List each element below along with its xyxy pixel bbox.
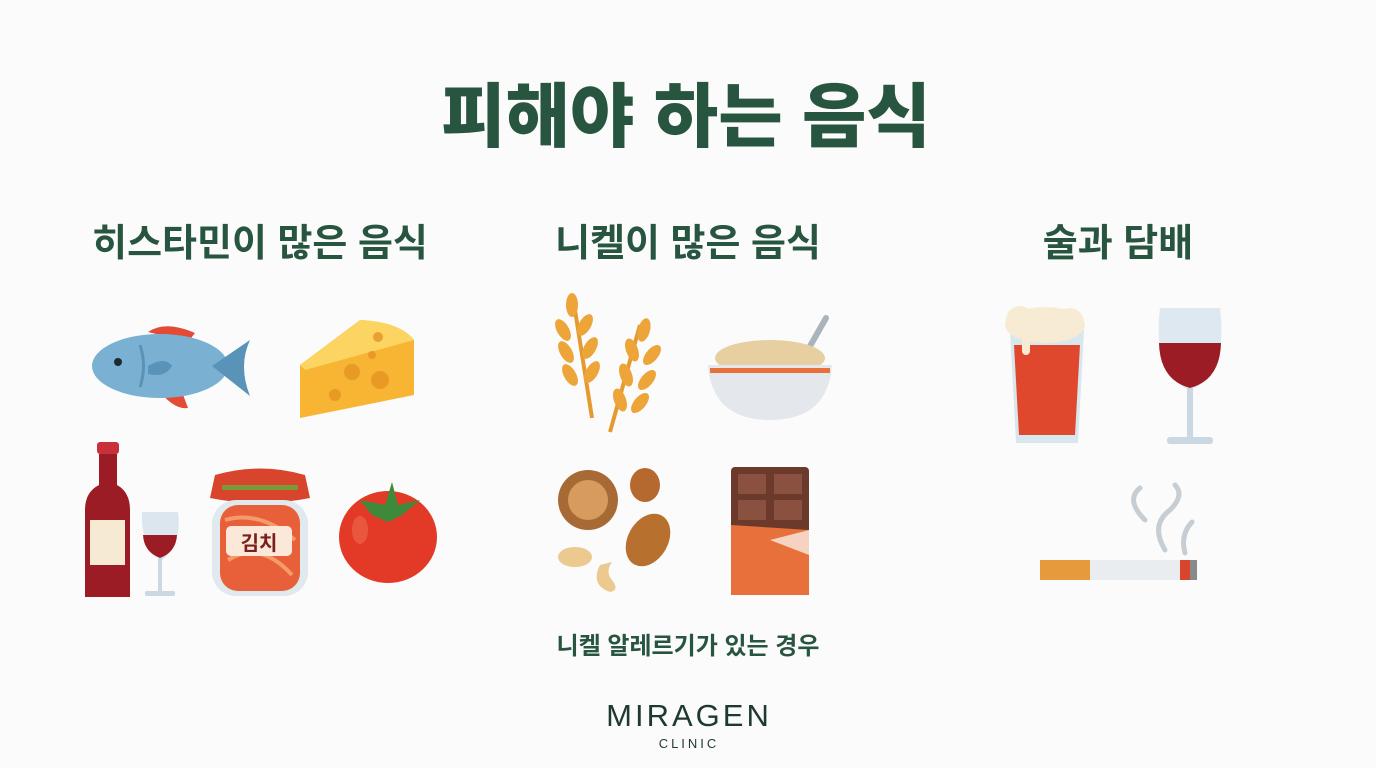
logo bbox=[606, 698, 772, 751]
icon: fish bbox=[92, 326, 250, 408]
icon: beer bbox=[1005, 306, 1085, 443]
icon: chocolate bar bbox=[731, 467, 809, 595]
heading: histamine: 히스타민이 많은 음식 bbox=[92, 223, 428, 265]
heading: alcohol tobacco: 술과 담배 bbox=[1043, 223, 1193, 265]
icon: kimchi jar: 김치 bbox=[241, 532, 277, 555]
heading: nickel: 니켈이 많은 음식 bbox=[555, 223, 821, 265]
icon: tomato bbox=[339, 482, 437, 583]
icon: oatmeal bowl bbox=[708, 318, 832, 420]
icon: cigarette bbox=[1040, 485, 1197, 580]
title: 피해야 하는 음식 bbox=[441, 78, 931, 156]
icon: wine bottle and glass bbox=[85, 442, 179, 597]
icon: cheese bbox=[300, 320, 414, 418]
logo: CLINIC bbox=[659, 736, 719, 751]
icon: kimchi jar bbox=[210, 468, 310, 596]
icon: wheat bbox=[552, 293, 664, 432]
logo: MIRAGEN bbox=[606, 698, 772, 733]
icon: wine glass bbox=[1159, 308, 1221, 444]
icon: nuts bbox=[558, 468, 679, 592]
note: nickel allergy: 니켈 알레르기가 있는 경우 bbox=[557, 633, 819, 660]
